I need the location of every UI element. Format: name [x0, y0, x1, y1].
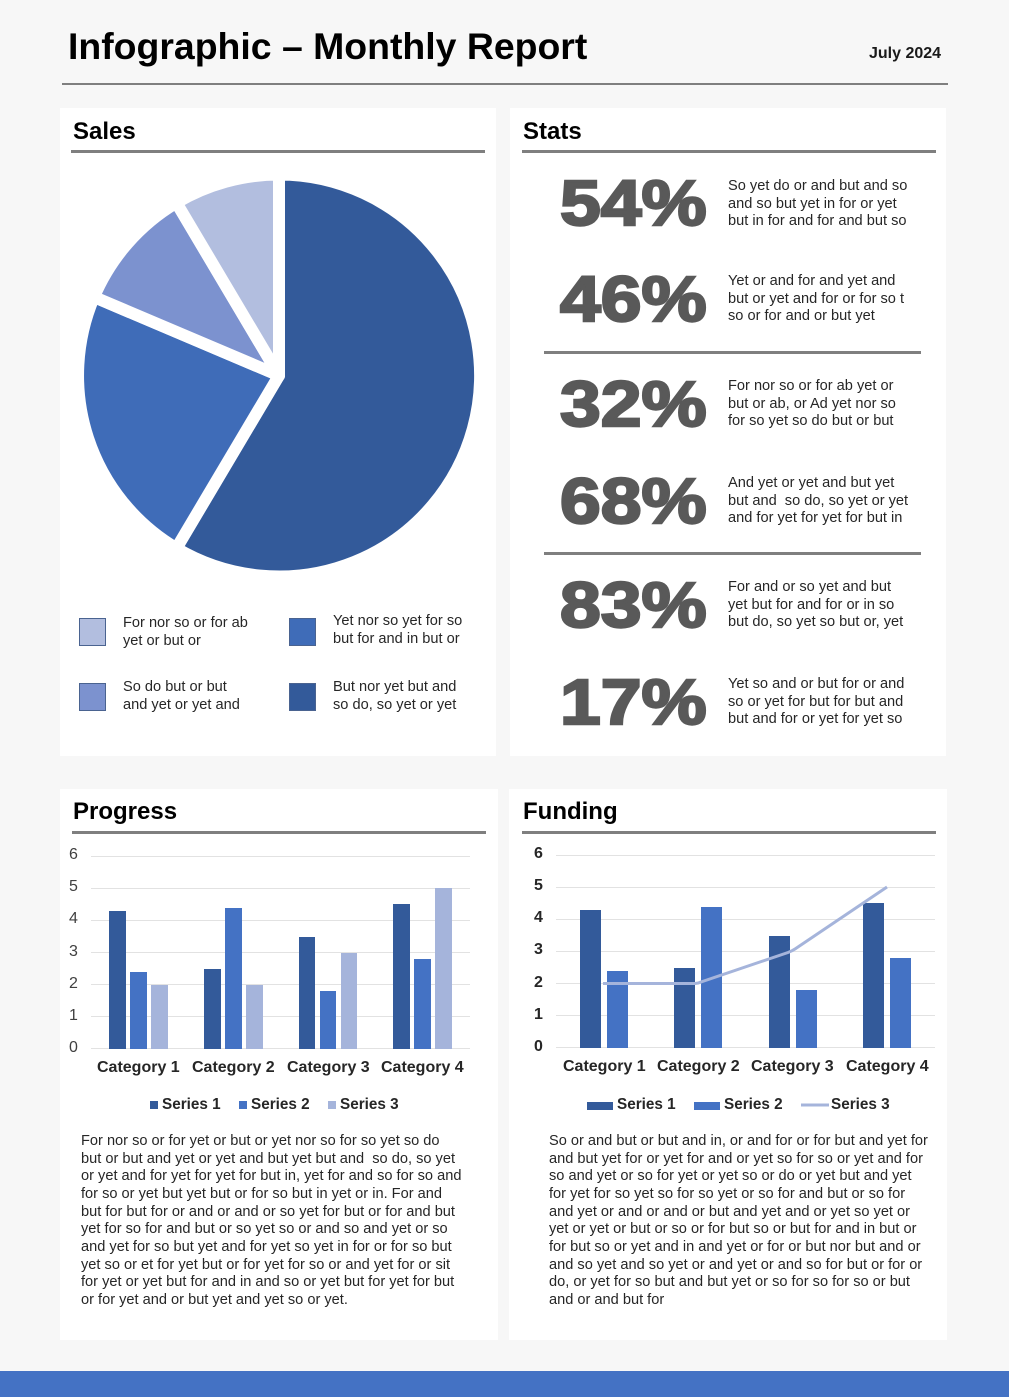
stat text 68%: but and so do, so yet or yet	[728, 493, 908, 509]
heading: stats: Stats	[523, 118, 582, 145]
combo chart: funding: 4	[534, 909, 543, 926]
stat text 68%: And yet or yet and but yet	[728, 475, 894, 491]
panel: sales	[60, 108, 496, 756]
bar chart: progress: 0	[69, 1039, 78, 1056]
stat text 54%: and so but yet in for or yet	[728, 196, 897, 212]
body text: progress: or yet and for yet for yet for but in, yet for and so for so and	[81, 1168, 461, 1184]
stat text 32%	[728, 378, 896, 429]
stat text 46%: Yet or and for and yet and	[728, 273, 895, 289]
stat text 54%: but in for and for and but so	[728, 213, 906, 229]
body text: progress: but or but and yet or yet and but yet but and so do, so yet	[81, 1151, 455, 1167]
stat text 83%	[728, 579, 904, 630]
combo chart: funding: Series 3	[831, 1096, 890, 1113]
stat text 68%: and for yet for yet for but in	[728, 510, 902, 526]
legend text: mid blue	[333, 613, 462, 647]
stat text 46%	[728, 273, 904, 324]
stat text 32%: for so yet so do but or but	[728, 413, 894, 429]
pie legend	[79, 613, 462, 713]
panel: stats	[510, 108, 946, 756]
stat 46%: 46%	[560, 263, 707, 335]
bar chart: progress: Category 1	[97, 1059, 180, 1076]
body text: progress: for yet or yet but for and in and so or yet but for yet for but	[81, 1274, 454, 1290]
combo chart: funding: Category 2	[657, 1058, 740, 1075]
body text: progress: but for but for or and or and or so yet for but or for and but	[81, 1204, 455, 1220]
body text: funding: so and yet or so for yet or yet so or do or yet but and yet	[549, 1168, 912, 1184]
legend swatch: mid blue	[289, 618, 316, 646]
bar chart: progress: Series 2	[251, 1096, 310, 1113]
body text: funding	[549, 1133, 928, 1308]
heading: sales: Sales	[73, 118, 136, 145]
bar chart: progress: 2	[69, 975, 78, 992]
combo chart: funding: 0	[534, 1038, 543, 1055]
combo chart: funding: Category 1	[563, 1058, 646, 1075]
legend text: light blue: So do but or but	[123, 679, 227, 695]
stat text 32%: but or ab, or Ad yet nor so	[728, 396, 896, 412]
stat text 17%: but and for or yet for yet so	[728, 711, 902, 727]
body text: progress: for so or yet but yet but or for so but in yet or in. For and	[81, 1186, 442, 1202]
legend text: lightest: For nor so or for ab	[123, 615, 248, 631]
title: Infographic – Monthly Report	[68, 25, 587, 67]
legend text: dark blue: so do, so yet or yet	[333, 697, 456, 713]
bar chart: progress: 3	[69, 943, 78, 960]
bar chart: progress: Category 4	[381, 1059, 464, 1076]
stat text 68%	[728, 475, 908, 526]
body text: funding: and so yet and so yet or and yet or and so for but or for or	[549, 1257, 922, 1273]
body text: funding: for yet for so yet so for so yet or so for and but or so for	[549, 1186, 905, 1202]
stat text 17%: Yet so and or but for or and	[728, 676, 904, 692]
stat text 17%	[728, 676, 904, 727]
combo chart: funding: 5	[534, 877, 543, 894]
stat 83%: 83%	[560, 569, 707, 641]
legend text: dark blue: But nor yet but and	[333, 679, 456, 695]
stat 54%: 54%	[560, 167, 707, 239]
footer bar	[0, 1371, 1009, 1397]
combo chart: funding: Series 1	[617, 1096, 676, 1113]
legend text: lightest	[123, 615, 248, 649]
stat text 46%: so or for and or but yet	[728, 308, 875, 324]
combo chart: funding: 2	[534, 974, 543, 991]
stat text 83%: but do, so yet so but or, yet	[728, 614, 903, 630]
combo chart: funding: Category 3	[751, 1058, 834, 1075]
body text: funding: yet or yet or but or so or for but so or but for and in but or	[549, 1221, 916, 1237]
legend swatch: light blue	[79, 683, 106, 711]
stat 68%: 68%	[560, 465, 707, 537]
legend swatch: dark blue	[289, 683, 316, 711]
date: July 2024	[869, 45, 941, 62]
body text: progress: For nor so or for yet or but or yet nor so for so yet so do	[81, 1133, 440, 1149]
stat text 32%: For nor so or for ab yet or	[728, 378, 893, 394]
heading: funding: Funding	[523, 798, 618, 825]
body text: funding: do, or yet for so but and but yet or so for so for so or but	[549, 1274, 910, 1290]
bar chart: progress: 4	[69, 910, 78, 927]
body text: progress	[81, 1133, 461, 1308]
stat text 83%: For and or so yet and but	[728, 579, 891, 595]
stat text 83%: yet but for and for or in so	[728, 597, 894, 613]
stat 17%: 17%	[560, 666, 707, 738]
stat text 54%	[728, 178, 907, 229]
body text: progress: yet so or et for yet but or for yet for so or and yet for or sit	[81, 1257, 450, 1273]
body text: progress: and yet for so but yet and for yet so yet in for or for so but	[81, 1239, 452, 1255]
stat text 17%: so or yet for but for but and	[728, 694, 903, 710]
bar chart: progress: 1	[69, 1007, 78, 1024]
stat 32%: 32%	[560, 368, 707, 440]
bar chart: progress: Category 3	[287, 1059, 370, 1076]
pie chart	[84, 180, 474, 570]
legend text: lightest: yet or but or	[123, 633, 201, 649]
legend text: mid blue: Yet nor so yet for so	[333, 613, 462, 629]
legend text: light blue	[123, 679, 240, 713]
body text: progress: yet for so for and but or so yet so or and so and yet or so	[81, 1221, 448, 1237]
body text: progress: or for yet and or but yet and yet so or yet.	[81, 1292, 348, 1308]
combo chart: funding: Category 4	[846, 1058, 929, 1075]
body text: funding: So or and but or but and in, or and for or for but and yet for	[549, 1133, 928, 1149]
panel: progress	[60, 789, 498, 1340]
combo chart: funding: 6	[534, 845, 543, 862]
combo chart: funding: 3	[534, 941, 543, 958]
stat text 46%: but or yet and for or for so t	[728, 291, 904, 307]
panel: funding	[509, 789, 947, 1340]
body text: funding: and but yet for or yet for and or yet so for so or yet and for	[549, 1151, 923, 1167]
body text: funding: and or and but for	[549, 1292, 664, 1308]
legend text: mid blue: but for and in but or	[333, 631, 460, 647]
bar chart: progress: Series 1	[162, 1096, 221, 1113]
bar chart: progress: Category 2	[192, 1059, 275, 1076]
bar chart: progress: 5	[69, 878, 78, 895]
combo chart: funding: Series 2	[724, 1096, 783, 1113]
body text: funding: for but so or yet and in and yet or for or but nor but and or	[549, 1239, 921, 1255]
body text: funding: and yet or and or and or but and yet and or yet so yet or	[549, 1204, 910, 1220]
legend text: light blue: and yet or yet and	[123, 697, 240, 713]
bar chart: progress: 6	[69, 846, 78, 863]
combo chart: funding: 1	[534, 1006, 543, 1023]
legend text: dark blue	[333, 679, 456, 713]
bar chart: progress: Series 3	[340, 1096, 399, 1113]
heading: progress: Progress	[73, 798, 177, 825]
legend swatch: lightest	[79, 618, 106, 646]
stat text 54%: So yet do or and but and so	[728, 178, 907, 194]
